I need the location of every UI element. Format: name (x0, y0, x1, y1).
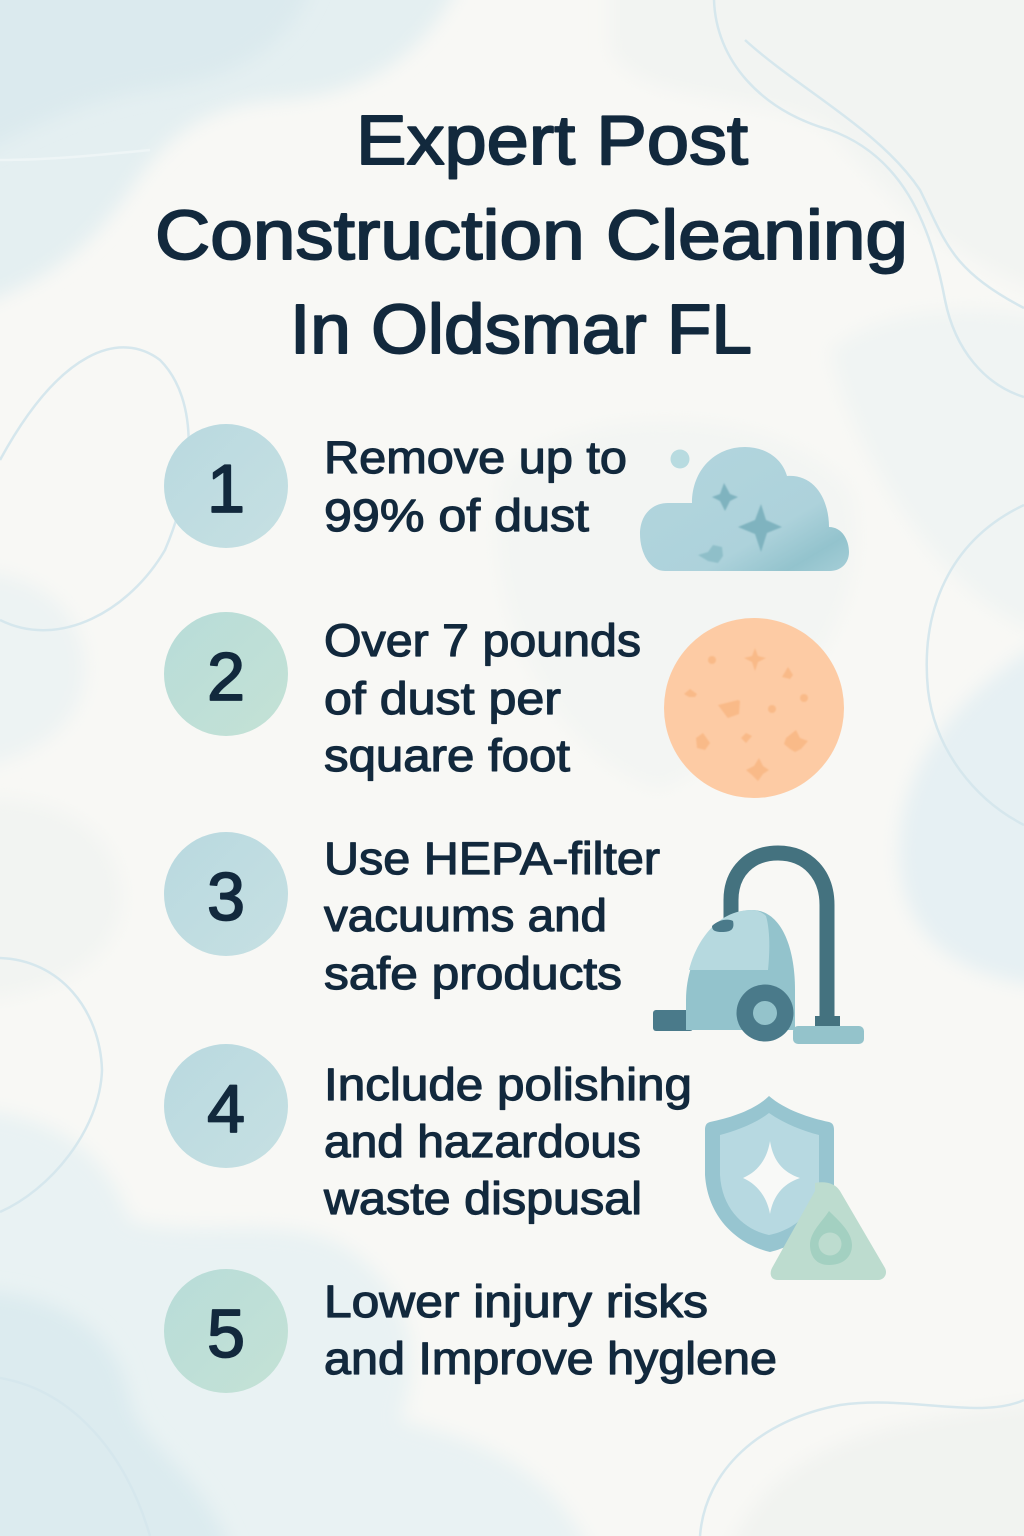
number badge 1: 1 (207, 451, 245, 527)
title (155, 101, 908, 368)
number badge 4 (164, 1044, 288, 1168)
item 2 (164, 612, 844, 798)
number badge 5: 5 (207, 1296, 245, 1372)
text: remove dust (324, 432, 627, 541)
number badge 1 (164, 424, 288, 548)
title: In Oldsmar FL (290, 290, 752, 368)
number badge 2: 2 (207, 639, 245, 715)
text: polishing and waste: and hazardous (324, 1116, 641, 1167)
text: HEPA vacuums: Use HEPA-filter (324, 833, 660, 884)
text: remove dust: 99% of dust (324, 490, 590, 541)
title: Expert Post (356, 101, 748, 179)
icon: vacuum cleaner (653, 853, 864, 1044)
text: polishing and waste: Include polishing (324, 1059, 692, 1110)
text: pounds of dust: square foot (324, 730, 571, 781)
number badge 4: 4 (207, 1071, 245, 1147)
text: pounds of dust (324, 615, 641, 781)
text: HEPA vacuums: vacuums and (324, 890, 607, 941)
text: lower injury risks: and Improve hyglene (324, 1333, 777, 1384)
number badge 3: 3 (207, 859, 245, 935)
item 3 (164, 832, 864, 1044)
item 1 (164, 424, 849, 571)
text: HEPA vacuums (324, 833, 660, 999)
number badge 5 (164, 1269, 288, 1393)
text: polishing and waste: waste dispusal (323, 1173, 642, 1224)
text: lower injury risks: Lower injury risks (324, 1276, 708, 1327)
icon: dust-covered orange circle (664, 618, 844, 798)
title: Construction Cleaning (155, 196, 908, 274)
icon: dust cloud (640, 447, 849, 571)
text: HEPA vacuums: safe products (324, 948, 622, 999)
item 5 (164, 1269, 777, 1393)
text: polishing and waste (323, 1059, 692, 1224)
number badge 2 (164, 612, 288, 736)
item 4 (164, 1044, 886, 1280)
number badge 3 (164, 832, 288, 956)
text: pounds of dust: of dust per (324, 673, 561, 724)
icon: shield and hazard triangle (705, 1096, 886, 1280)
text: pounds of dust: Over 7 pounds (324, 615, 641, 666)
text: remove dust: Remove up to (324, 432, 627, 483)
text: lower injury risks (324, 1276, 777, 1384)
